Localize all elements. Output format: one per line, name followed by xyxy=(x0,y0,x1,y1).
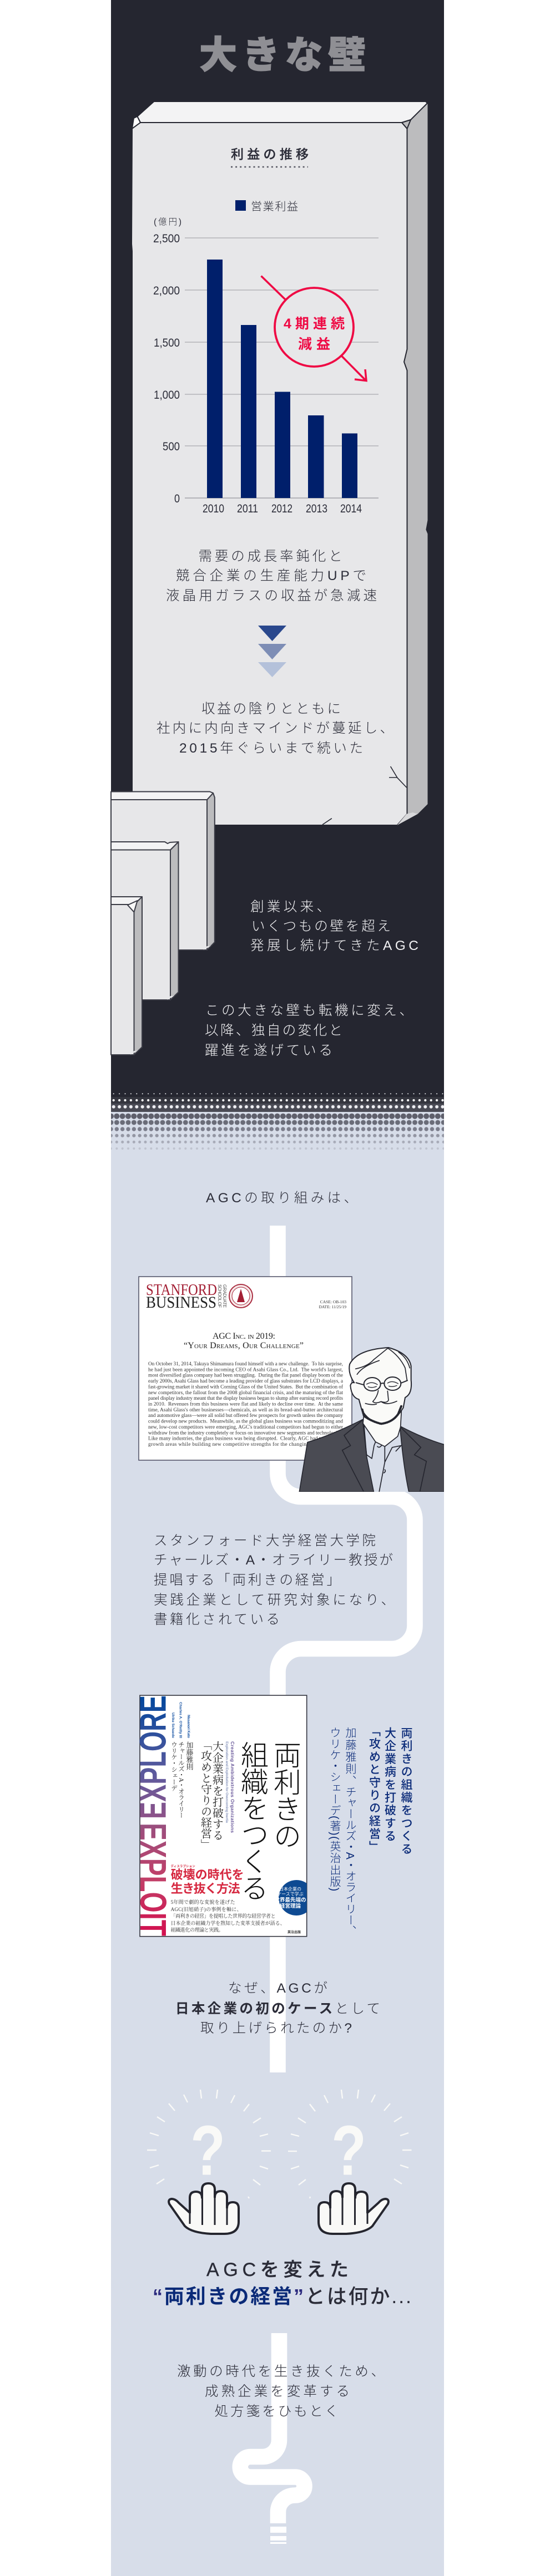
text: turned this wall into opportunity: 躍進を遂げている xyxy=(205,1043,332,1058)
case body text: growth areas while building new competitive strengths for the changing global market. xyxy=(148,1441,343,1447)
text: prescription: 処方箋をひもとく xyxy=(215,2404,339,2419)
question mark: ? xyxy=(331,2111,366,2190)
case body text: withdraw from the industry completely or focus on innovative new segments and technologies. xyxy=(148,1430,343,1436)
book blue badge: 世界最先端の xyxy=(274,1897,306,1903)
text: overcame many walls: いくつもの壁を超え xyxy=(251,918,391,934)
case body text: early 2000s, Asahi Glass had become a leading provider of glass substrates for LCD displays, a xyxy=(148,1378,343,1384)
book blue badge xyxy=(274,1880,307,1916)
bar chart: operating profit: (億円) xyxy=(154,217,181,227)
text: Stanford professor research: チャールズ・A・オライリー教授が xyxy=(154,1552,393,1568)
book title: 組織をつくる xyxy=(237,1741,268,1901)
icon: left question hand xyxy=(147,2090,271,2234)
case body text: and automotive glass—were all solid but offered few prospects for growth unless the company xyxy=(148,1413,343,1419)
white winding path xyxy=(278,1226,415,2072)
book red tagline: ディスラプション xyxy=(171,1864,195,1868)
infographic canvas xyxy=(110,0,444,2576)
y axis labels: 0 xyxy=(174,492,180,505)
Stanford logo: SCHOOL OF xyxy=(217,1284,222,1308)
y axis labels xyxy=(153,232,180,505)
book authors: Ulrike Schaede xyxy=(171,1713,175,1738)
y axis labels: 2,000 xyxy=(153,284,180,297)
case body text: panel display industry meant that the display business began to slump after earning record profits xyxy=(148,1395,343,1401)
x axis labels xyxy=(203,502,362,515)
text: demand slowdown: 需要の成長率鈍化と xyxy=(199,548,342,564)
grid lines xyxy=(185,238,379,498)
text: inward mindset: 収益の陰りとともに xyxy=(201,701,341,717)
book blue badge: 経営理論 xyxy=(280,1903,301,1909)
heading: what is ambidextrous management xyxy=(153,2259,411,2308)
text: why AGC question xyxy=(175,1980,380,2036)
text: turned this wall into opportunity xyxy=(205,1003,413,1058)
callout: four consecutive profit declines: 4期連続 xyxy=(284,316,345,332)
Stanford case document xyxy=(139,1277,352,1460)
text: Stanford professor research: 書籍化されている xyxy=(154,1612,280,1627)
hand xyxy=(319,2183,389,2234)
chart heading: 利益の推移 xyxy=(231,147,309,161)
shirt xyxy=(374,1488,405,1492)
spine lettering EXPLORE / EXPLOIT: EXPLORE xyxy=(133,1695,174,1819)
book subtitle xyxy=(199,1739,235,1850)
case body text: On October 31, 2014, Takuya Shimamura found himself with a new challenge. To his surprise, xyxy=(148,1361,343,1367)
book subtitle: Creating Ambidextrous Organizations xyxy=(230,1741,235,1833)
arrow xyxy=(342,356,366,380)
case body text xyxy=(148,1361,344,1447)
book subtitle: Exploration and Exploitation for Overcoming Inertia xyxy=(225,1741,229,1823)
book info vertical text: 「攻めと守りの経営」 xyxy=(367,1725,381,1853)
rays xyxy=(147,2090,271,2198)
case body text: time, Asahi Glass's other businesses—chemicals, as well as its bread-and-butter architectural xyxy=(148,1408,343,1413)
case body text: could develop new products. Meanwhile, as the global glass business was commoditizing and xyxy=(148,1419,343,1425)
small wall 2 xyxy=(111,842,179,1000)
x axis labels: 2014 xyxy=(340,502,362,515)
callout: four consecutive profit declines: 減益 xyxy=(298,337,330,352)
book description: 「両利きの経営」を提唱した世界的な経営学者と xyxy=(171,1913,276,1919)
panel: light section approach xyxy=(111,1093,445,2576)
neck and collar xyxy=(363,1410,401,1446)
Stanford case document: CASE: OB-103 xyxy=(320,1299,346,1304)
book blue badge: 日本企業の xyxy=(279,1886,301,1892)
text: Stanford professor research: 実践企業として研究対象になり、 xyxy=(154,1592,395,1608)
icon: right question hand xyxy=(288,2090,412,2234)
book authors: Masanori Kato xyxy=(186,1715,190,1738)
arrow: three descending triangles xyxy=(258,626,286,677)
callout: four consecutive profit declines xyxy=(261,276,366,380)
book blue badge: ケースで学ぶ xyxy=(277,1891,304,1897)
small wall 3 xyxy=(111,897,142,1055)
y axis labels: 500 xyxy=(163,440,180,453)
text: overcame many walls: 創業以来、 xyxy=(250,899,330,914)
book title: 両利きの xyxy=(270,1741,301,1849)
case body text: fast-growing market it shared with Corning Glass of the United States. But the combination of xyxy=(148,1384,344,1390)
book description: 英治出版 xyxy=(287,1930,301,1934)
beard xyxy=(362,1406,401,1424)
case title xyxy=(184,1332,304,1350)
book description: 5年間で劇的な変貌を遂げた xyxy=(171,1899,235,1905)
text: overcame many walls: 発展し続けてきたAGC xyxy=(250,938,418,953)
case title: “Your Dreams, Our Challenge” xyxy=(184,1341,304,1350)
heading text: AGC efforts: AGCの取り組みは、 xyxy=(206,1190,357,1206)
case body text: Like many industries, the glass business was being disrupted. Clearly, AGC had to find new xyxy=(148,1436,343,1442)
book authors: チャールズ・A・オライリー xyxy=(178,1741,185,1818)
halftone dot transition xyxy=(111,1093,444,1150)
book authors xyxy=(170,1702,193,1818)
book info vertical text: ウリケ・シェーデ (著)(英治出版) xyxy=(328,1727,341,1892)
title: 大きな壁 xyxy=(199,34,366,77)
book description: 組織進化の理論と実践。 xyxy=(171,1927,224,1933)
text: inward mindset: 社内に内向きマインドが蔓延し、 xyxy=(157,720,393,736)
x axis labels: 2010 xyxy=(203,502,224,515)
jacket xyxy=(299,1419,445,1492)
text: why AGC question: 取り上げられたのか? xyxy=(200,2021,352,2036)
book description xyxy=(171,1899,301,1934)
big wall slab xyxy=(132,101,427,825)
x axis labels: 2013 xyxy=(306,502,327,515)
case body text: in 2010. Revenues from this business were flat and likely to decline over time. At the same xyxy=(148,1401,343,1408)
book red tagline xyxy=(171,1864,244,1896)
Stanford case document: DATE: 11/25/19 xyxy=(319,1304,346,1309)
text: demand slowdown xyxy=(166,548,377,603)
text: prescription: 成熟企業を変革する xyxy=(205,2384,350,2399)
text: why AGC question: 日本企業の初のケースとして xyxy=(175,2001,380,2016)
text: turned this wall into opportunity: この大きな壁も転機に変え、 xyxy=(205,1003,413,1018)
text: why AGC question: なぜ、AGCが xyxy=(228,1980,327,1996)
text: demand slowdown: 液晶用ガラスの収益が急減速 xyxy=(166,588,377,603)
book title xyxy=(237,1741,301,1901)
book info vertical text: 加藤雅則 、チャールズ・A・オライリー、 xyxy=(344,1727,356,1936)
book info vertical text xyxy=(328,1725,413,1936)
book description: 日本企業の組織力学を熟知した変革支援者が語る、 xyxy=(171,1920,285,1926)
text: inward mindset xyxy=(157,701,393,756)
book info vertical text: 両利きの組織をつくる xyxy=(400,1727,413,1856)
book subtitle: 大企業病を打破する xyxy=(211,1741,223,1841)
bar chart: operating profit xyxy=(153,200,379,515)
Stanford logo: BUSINESS xyxy=(146,1293,216,1312)
book authors: Charles A. O'Reilly III xyxy=(179,1702,182,1738)
case title: AGC Inc. in 2019: xyxy=(213,1332,275,1341)
text: Stanford professor research xyxy=(154,1533,395,1627)
Stanford logo: GRADUATE xyxy=(222,1284,227,1308)
case body text: new competitors, the fallout from the 2008 global financial crisis, and the maturing of the flat xyxy=(148,1390,343,1396)
Stanford logo: STANFORD xyxy=(146,1282,217,1299)
text: Stanford professor research: 提唱する「両利きの経営」 xyxy=(154,1572,340,1588)
text: Stanford professor research: スタンフォード大学経営大学院 xyxy=(154,1533,376,1548)
book cover xyxy=(132,1695,307,1937)
x axis labels: 2011 xyxy=(237,502,258,515)
text: demand slowdown: 競合企業の生産能力UPで xyxy=(176,568,366,583)
hair lines xyxy=(356,1348,410,1380)
Stanford logo xyxy=(146,1282,253,1312)
text: overcame many walls xyxy=(250,899,418,953)
heading: what is ambidextrous management: AGCを変えた xyxy=(206,2259,349,2280)
small wall 1 xyxy=(111,792,215,950)
book red tagline: 生き抜く方法 xyxy=(171,1882,240,1896)
spine lettering EXPLORE / EXPLOIT: EXPLOIT xyxy=(132,1823,174,1936)
legend: 営業利益 xyxy=(251,200,298,213)
text: prescription: 激動の時代を生き抜くため、 xyxy=(177,2364,385,2379)
head xyxy=(349,1348,411,1424)
case body text: he had just been appointed the incoming CEO of Asahi Glass Co., Ltd. The world's largest, xyxy=(148,1366,343,1373)
book authors: ウリケ・シェーデ xyxy=(170,1741,177,1791)
book subtitle: 「攻めと守りの経営」 xyxy=(199,1739,212,1850)
heading: what is ambidextrous management: “両利きの経営”とは何か... xyxy=(153,2285,411,2308)
nose and moustache xyxy=(365,1390,397,1405)
bars xyxy=(207,260,357,498)
book authors: 加藤雅則 xyxy=(185,1741,193,1771)
panel: dark section big wall xyxy=(111,0,444,1115)
rays xyxy=(288,2090,412,2198)
hand xyxy=(169,2183,239,2234)
book description: AGC(旧旭硝子)の事例を軸に、 xyxy=(171,1906,242,1912)
spine lettering EXPLORE / EXPLOIT xyxy=(132,1695,174,1936)
text: prescription xyxy=(177,2364,385,2419)
y axis labels: 2,500 xyxy=(153,232,180,245)
text: inward mindset: 2015年ぐらいまで続いた xyxy=(179,740,363,756)
question mark: ? xyxy=(190,2111,225,2190)
x axis labels: 2012 xyxy=(271,502,292,515)
case body text: most diversified glass company had been struggling. During the flat panel display boom of the xyxy=(148,1373,343,1379)
text: turned this wall into opportunity: 以降、独自の変化と xyxy=(205,1023,342,1038)
book info vertical text: 大企業病を打破する xyxy=(383,1727,396,1843)
book red tagline: 破壊の時代を xyxy=(171,1868,244,1882)
y axis labels: 1,000 xyxy=(154,389,180,402)
white winding path lower xyxy=(240,2333,304,2544)
glasses xyxy=(356,1377,407,1391)
illustration: professor portrait xyxy=(299,1348,445,1492)
case body text: new, low-cost competitors were emerging, AGC's traditional competitors had begun to either xyxy=(148,1425,344,1430)
y axis labels: 1,500 xyxy=(154,337,180,349)
